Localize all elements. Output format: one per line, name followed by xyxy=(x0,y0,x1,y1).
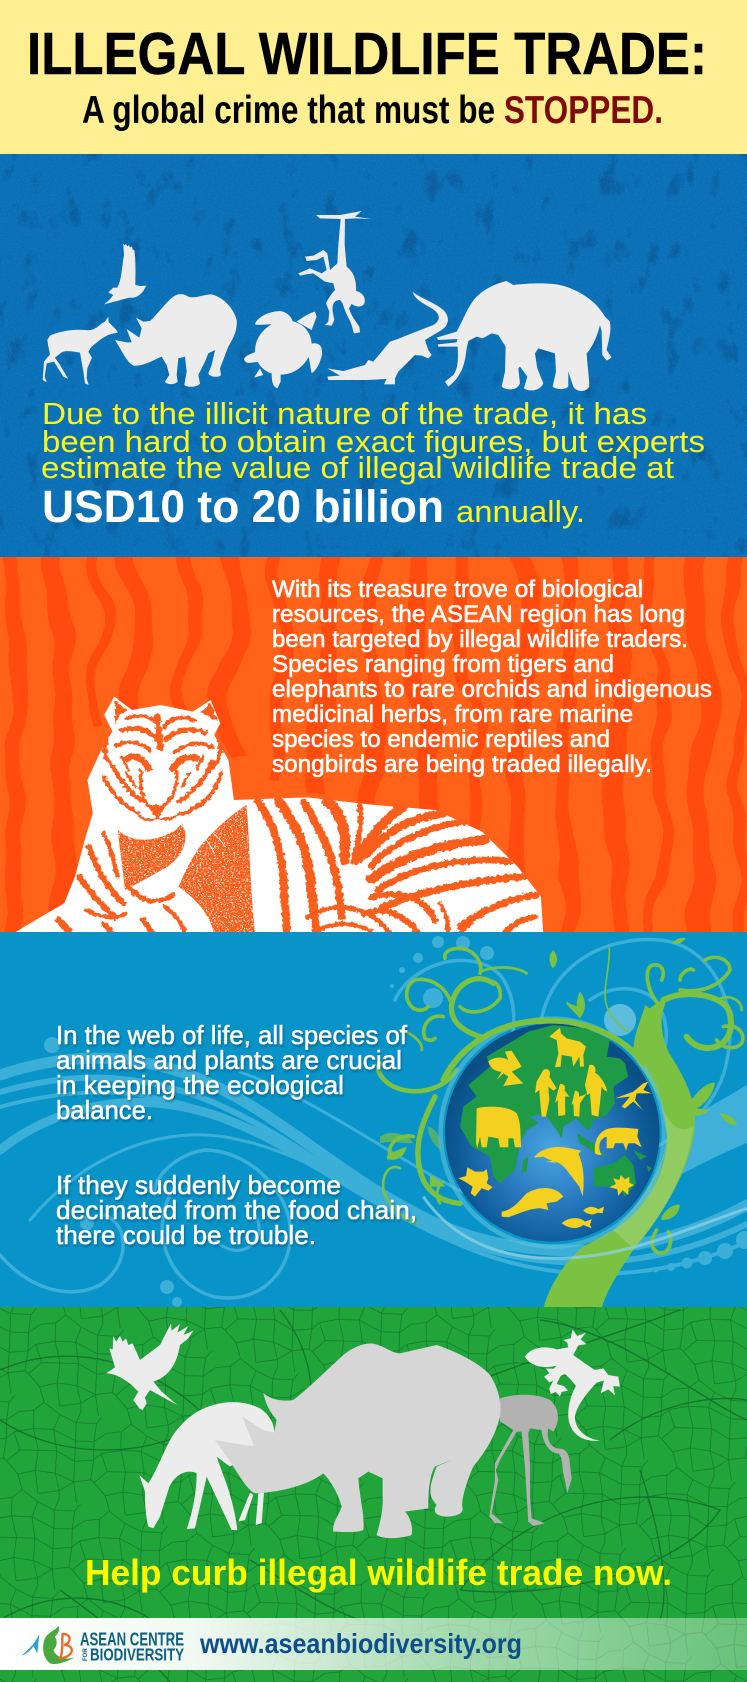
icon: monkey on branch xyxy=(298,211,372,333)
text: estimate of illegal trade value: been hard to obtain exact figures, but experts xyxy=(42,424,705,459)
logo: ASEAN Centre for Biodiversity: ASEAN CENTRE xyxy=(80,1630,184,1650)
text: ASEAN region targeted: species to endemic reptiles and xyxy=(272,726,610,753)
logo: ASEAN Centre for Biodiversity: BIODIVERSITY xyxy=(90,1644,184,1664)
text: ASEAN region targeted: been targeted by illegal wildlife traders. xyxy=(272,626,688,653)
panel: ASEAN region tiger xyxy=(0,540,747,950)
text: estimate of illegal trade value: USD10 to 20 billion xyxy=(42,481,444,532)
animal silhouettes group xyxy=(106,1323,620,1538)
subtitle: A global crime that must be STOPPED. xyxy=(82,89,663,132)
website url: www.aseanbiodiversity.org xyxy=(199,1628,522,1659)
text: estimate of illegal trade value: annually. xyxy=(456,494,585,529)
text: estimate of illegal trade value: Due to the illicit nature of the trade, it has xyxy=(42,396,647,431)
text: estimate of illegal trade value: estimate the value of illegal wildlife trade at xyxy=(41,450,674,485)
illustration: tiger xyxy=(11,697,543,937)
logo: ASEAN Centre for Biodiversity: FOR xyxy=(83,1648,89,1661)
panel: web of life xyxy=(0,932,747,1308)
text: web of life: decimated from the food chain, xyxy=(56,1195,417,1225)
text: web of life: animals and plants are crucial xyxy=(56,1045,402,1075)
text: ASEAN region targeted: songbirds are being traded illegally. xyxy=(272,751,652,778)
text: ASEAN region targeted: With its treasure trove of biological xyxy=(272,576,643,603)
text: ASEAN region targeted: medicinal herbs, from rare marine xyxy=(272,701,633,728)
text: ASEAN region targeted: elephants to rare orchids and indigenous xyxy=(272,676,712,703)
logo: ASEAN Centre for Biodiversity xyxy=(22,1626,184,1664)
panel: trade value on blue wall xyxy=(0,154,747,557)
decorative bubbles xyxy=(44,936,747,1307)
icon: eagle xyxy=(104,244,146,304)
text: web of life xyxy=(56,1020,417,1250)
text: estimate of illegal trade value xyxy=(41,396,705,532)
call to action text: Help curb illegal wildlife trade now. xyxy=(85,1552,672,1593)
globe xyxy=(445,1024,660,1242)
icon: grazing antelope xyxy=(139,1402,274,1530)
tree trunk and crown xyxy=(378,938,743,1308)
panel: call to action on leaves xyxy=(0,1307,747,1682)
text: web of life: in keeping the ecological xyxy=(56,1070,344,1100)
icon: elephant xyxy=(437,281,612,391)
text: ASEAN region targeted xyxy=(272,576,712,778)
text: web of life: If they suddenly become xyxy=(56,1170,341,1200)
text: web of life: balance. xyxy=(56,1095,153,1125)
text: web of life: there could be trouble. xyxy=(56,1220,316,1250)
icon: rhino xyxy=(215,1343,501,1538)
illustration: tree and globe xyxy=(378,938,747,1308)
icon: gecko xyxy=(525,1329,620,1441)
animal silhouettes right xyxy=(298,211,612,391)
pale halo ring xyxy=(441,1019,664,1247)
animals and people on the globe xyxy=(458,1028,652,1228)
continents xyxy=(460,1025,652,1197)
text: web of life: In the web of life, all species of xyxy=(56,1020,408,1050)
icon: flamingo xyxy=(489,1395,572,1526)
icon: crocodile xyxy=(327,292,448,384)
text: ASEAN region targeted: resources, the ASEAN region has long xyxy=(272,601,685,628)
panel: title banner xyxy=(0,0,747,154)
footer band xyxy=(0,1618,747,1670)
icon: rhino xyxy=(115,294,237,387)
icon: sea turtle xyxy=(244,310,322,388)
icon: antelope xyxy=(43,317,118,385)
text: ASEAN region targeted: Species ranging from tigers and xyxy=(272,651,614,678)
animal silhouettes left xyxy=(43,244,322,388)
icon: bird xyxy=(106,1323,193,1410)
